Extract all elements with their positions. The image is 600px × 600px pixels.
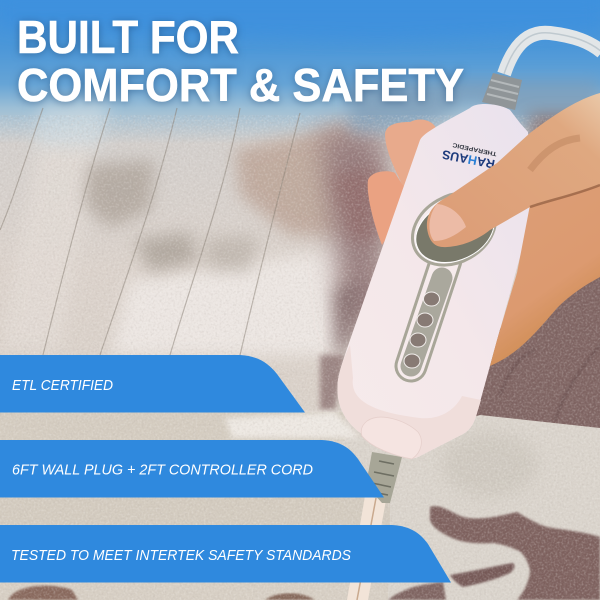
top blue band [0, 0, 600, 40]
blanket shadows [85, 160, 155, 228]
soft lit areas [110, 250, 340, 355]
white folded blanket, lower right [280, 415, 600, 600]
title [17, 11, 464, 111]
quilt seams [0, 108, 300, 355]
cords, bottom [347, 496, 386, 600]
dial button [399, 178, 509, 280]
lower rim [337, 345, 481, 458]
right dark blanket behind hand [470, 260, 600, 430]
heat level buttons [404, 292, 440, 368]
hand: back fingers [368, 120, 436, 245]
banner: ETL certified [0, 355, 305, 412]
banner: cord lengths: 6FT WALL PLUG + 2FT CONTROLLER CORD [12, 462, 313, 478]
lower-left blanket bands [0, 412, 345, 441]
power cords, top [504, 33, 600, 74]
cord strain relief, bottom [366, 452, 402, 503]
heat level slot [411, 260, 446, 366]
banner: safety standards: TESTED TO MEET INTERTEK SAFETY STANDARDS [11, 547, 351, 564]
upper right wash [350, 80, 600, 130]
dark blanket folds, lower right [430, 506, 600, 600]
title: BUILT FOR [17, 11, 239, 63]
banner: safety standards [0, 525, 451, 582]
brand logo: RAHAUS [441, 147, 496, 171]
title: COMFORT & SAFETY [17, 59, 464, 111]
brand logo: THERAPEDIC [451, 141, 497, 156]
controller body [337, 104, 531, 459]
hand: thumb [427, 93, 600, 247]
cord collar [361, 417, 421, 459]
cord strain relief, top [482, 73, 522, 110]
banner: ETL certified: ETL CERTIFIED [12, 377, 113, 394]
hand: palm [490, 170, 600, 366]
banner: cord lengths [0, 440, 384, 498]
